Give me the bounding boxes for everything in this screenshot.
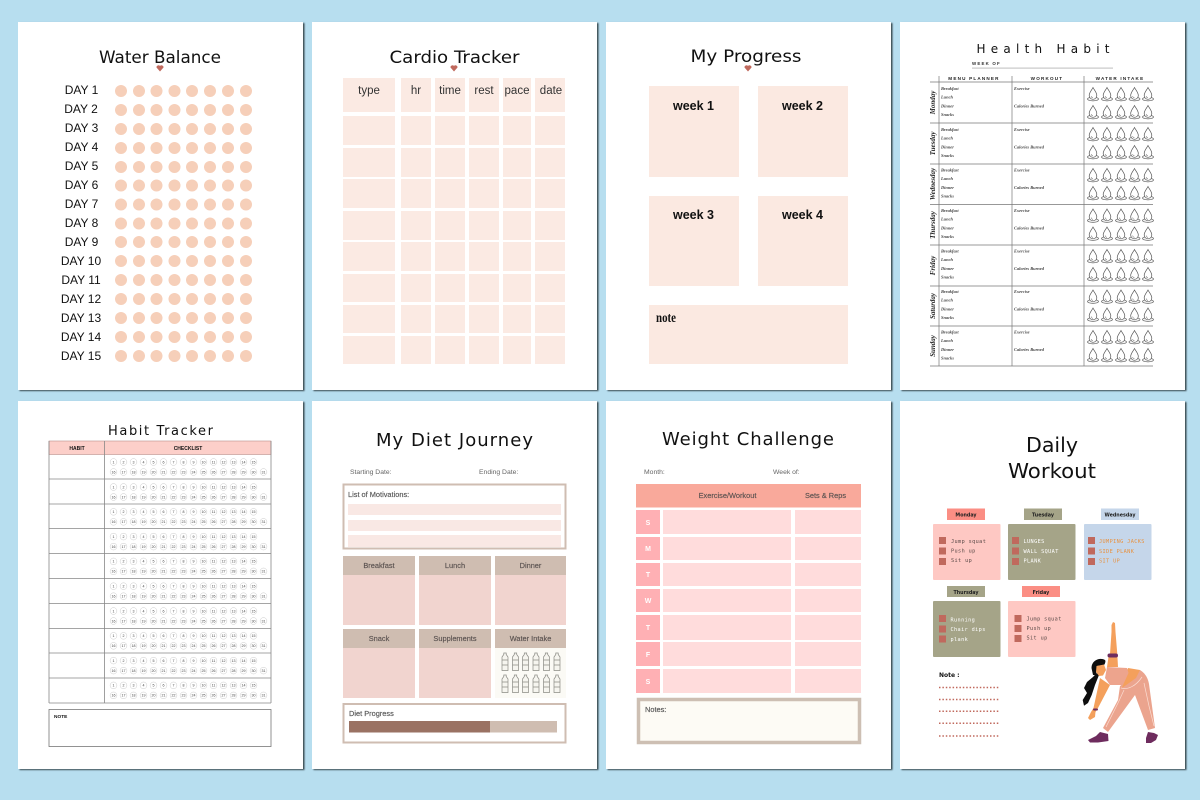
card: wednesday: JUMPING JACKS bbox=[1099, 539, 1145, 545]
date labels: Week of: bbox=[773, 469, 800, 476]
wrist band bbox=[1093, 708, 1098, 710]
meal: snack: Snack bbox=[369, 634, 390, 643]
panel: weight challenge bbox=[606, 401, 891, 769]
card: friday bbox=[1008, 586, 1076, 657]
water dots grid bbox=[115, 85, 252, 362]
table headers: WORKOUT bbox=[1031, 76, 1063, 81]
table headers bbox=[948, 76, 1144, 81]
head hair cap bbox=[1092, 659, 1105, 675]
motivations box: List of Motivations: bbox=[348, 490, 409, 499]
meal: breakfast: Breakfast bbox=[363, 561, 395, 570]
heading: daily workout: Workout bbox=[1008, 459, 1096, 483]
table header bbox=[49, 441, 271, 454]
card: wednesday: SIDE PLANK bbox=[1099, 549, 1135, 555]
week 3 box bbox=[649, 196, 739, 286]
day labels: DAY 1 bbox=[65, 83, 99, 97]
day labels: DAY 3 bbox=[65, 121, 99, 135]
date labels bbox=[350, 469, 518, 476]
date labels: Starting Date: bbox=[350, 469, 392, 476]
card: monday: Monday bbox=[955, 512, 977, 518]
notes box bbox=[638, 700, 860, 742]
day row labels bbox=[940, 86, 1045, 360]
column headers: type bbox=[358, 85, 380, 97]
day labels: DAY 7 bbox=[65, 197, 99, 211]
meal: lunch: Lunch bbox=[445, 561, 465, 570]
table headers: MENU PLANNER bbox=[948, 76, 1000, 81]
week 2 box: week 2 bbox=[781, 99, 823, 113]
meal: dinner: Dinner bbox=[520, 561, 542, 570]
table grid lines bbox=[930, 76, 1153, 366]
raised arm bbox=[1107, 622, 1118, 667]
day letters: W bbox=[645, 598, 652, 605]
day labels: DAY 13 bbox=[61, 311, 101, 325]
table header: Exercise/Workout bbox=[699, 491, 756, 500]
day labels: DAY 4 bbox=[65, 140, 99, 154]
water drops bbox=[1088, 88, 1154, 362]
wristband bbox=[1108, 654, 1118, 658]
card: thursday: Thursday bbox=[954, 590, 979, 596]
day letters: T bbox=[646, 572, 651, 579]
table header: HABIT bbox=[69, 446, 85, 452]
table header: CHECKLIST bbox=[174, 446, 202, 452]
illustration: stretching woman bbox=[1083, 622, 1158, 743]
day labels: DAY 11 bbox=[61, 273, 101, 287]
column headers: rest bbox=[474, 85, 494, 97]
card: monday: Sit up bbox=[951, 558, 972, 564]
table header bbox=[636, 484, 861, 508]
notes box: Notes: bbox=[645, 705, 666, 714]
leggings highlight bbox=[1106, 677, 1154, 727]
hair bbox=[1083, 673, 1099, 706]
icon: heart bbox=[450, 65, 458, 72]
day labels: DAY 8 bbox=[65, 216, 99, 230]
heading: daily workout bbox=[1008, 433, 1096, 483]
meal: snack bbox=[343, 629, 415, 698]
table header: Sets & Reps bbox=[805, 491, 846, 500]
day letters: S bbox=[646, 520, 651, 527]
heading: habit tracker: Habit Tracker bbox=[108, 424, 214, 439]
panel: cardio tracker bbox=[312, 22, 597, 390]
card: tuesday: LUNGES bbox=[1024, 539, 1045, 545]
day labels: DAY 15 bbox=[61, 349, 101, 363]
date labels: Ending Date: bbox=[479, 469, 518, 476]
heading: my diet journey: My Diet Journey bbox=[376, 430, 533, 451]
exercise rows bbox=[663, 510, 861, 693]
column headers: time bbox=[439, 85, 461, 97]
card: wednesday: SIT UP bbox=[1099, 558, 1120, 564]
panel: health habit bbox=[900, 22, 1185, 390]
meal: dinner bbox=[495, 556, 566, 625]
card: tuesday: WALL SQUAT bbox=[1024, 549, 1059, 555]
hanging arm bbox=[1088, 678, 1110, 720]
weekday names: Thursday bbox=[929, 210, 937, 239]
card: friday: Friday bbox=[1033, 590, 1050, 596]
note box bbox=[649, 305, 848, 364]
heading: water balance: Water Balance bbox=[99, 48, 221, 68]
day letters: S bbox=[646, 679, 651, 686]
week 3 box: week 3 bbox=[672, 208, 714, 222]
weekday names bbox=[929, 90, 937, 357]
date labels bbox=[644, 469, 800, 476]
note box bbox=[49, 710, 271, 746]
icon: heart bbox=[156, 65, 164, 72]
card: friday: Jump squat bbox=[1026, 616, 1062, 622]
column headers bbox=[358, 85, 562, 97]
card: wednesday: Wednesday bbox=[1105, 512, 1136, 518]
belly bbox=[1122, 668, 1140, 688]
weekday names: Tuesday bbox=[929, 131, 937, 155]
day labels bbox=[61, 83, 101, 363]
note box: NOTE bbox=[54, 714, 68, 720]
weekday names: Monday bbox=[929, 90, 937, 115]
leggings bbox=[1103, 670, 1155, 732]
panel: habit tracker bbox=[18, 401, 303, 769]
note box: note bbox=[656, 311, 676, 326]
left shoe bbox=[1088, 732, 1108, 742]
day labels: DAY 2 bbox=[64, 102, 98, 116]
day labels: DAY 10 bbox=[61, 254, 101, 268]
diet progress bar bbox=[344, 704, 566, 742]
sports top bbox=[1105, 667, 1128, 685]
card: monday: Jump squat bbox=[951, 539, 986, 545]
meal: breakfast bbox=[343, 556, 415, 625]
heading: weight challenge: Weight Challenge bbox=[662, 429, 834, 450]
icon: heart bbox=[744, 65, 752, 72]
meal: supplements bbox=[419, 629, 491, 698]
day letters: F bbox=[646, 652, 651, 659]
column headers: date bbox=[540, 85, 562, 97]
heading: health habit: Health Habit bbox=[976, 42, 1110, 56]
card: tuesday: Tuesday bbox=[1032, 512, 1055, 518]
week 1 box bbox=[649, 86, 739, 177]
meal: supplements: Supplements bbox=[433, 634, 477, 643]
day labels: DAY 14 bbox=[61, 330, 101, 344]
table headers: WATER INTAKE bbox=[1096, 76, 1144, 81]
week of line: WEEK OF bbox=[972, 61, 1001, 66]
day labels: DAY 9 bbox=[65, 235, 99, 249]
day labels: DAY 5 bbox=[65, 159, 99, 173]
meal: lunch bbox=[419, 556, 491, 625]
heading: daily workout: Daily bbox=[1026, 433, 1078, 457]
card: thursday: Running bbox=[950, 618, 975, 624]
card: friday: Push up bbox=[1026, 626, 1051, 632]
panel: daily workout bbox=[900, 401, 1185, 769]
weekday names: Wednesday bbox=[929, 167, 937, 200]
week 2 box bbox=[758, 86, 848, 177]
right shoe bbox=[1146, 732, 1158, 743]
card: monday: Push up bbox=[951, 548, 976, 554]
card: thursday: plank bbox=[950, 637, 969, 643]
day labels: DAY 12 bbox=[61, 292, 101, 306]
weekday names: Sunday bbox=[929, 334, 937, 357]
date labels: Month: bbox=[644, 469, 665, 476]
diet progress bar: Diet Progress bbox=[349, 709, 394, 718]
panel: water balance bbox=[18, 22, 303, 390]
day letters: T bbox=[646, 625, 651, 632]
week 1 box: week 1 bbox=[672, 99, 714, 113]
weekday names: Friday bbox=[929, 255, 937, 275]
card: tuesday: PLANK bbox=[1024, 558, 1042, 564]
week 4 box: week 4 bbox=[781, 208, 823, 222]
card: friday: Sit up bbox=[1026, 636, 1048, 642]
note lines: Note : bbox=[939, 672, 960, 679]
face bbox=[1096, 664, 1106, 676]
day letters: M bbox=[645, 546, 651, 553]
panel: my progress bbox=[606, 22, 891, 390]
card: thursday bbox=[933, 586, 1000, 657]
week 4 box bbox=[758, 196, 848, 286]
table grid bbox=[49, 441, 271, 703]
heading: cardio tracker: Cardio Tracker bbox=[390, 48, 520, 68]
motivations box bbox=[344, 484, 566, 548]
water intake bottles bbox=[495, 629, 566, 698]
cardio table bbox=[343, 78, 565, 364]
card: monday bbox=[933, 508, 1000, 580]
panel: my diet journey bbox=[312, 401, 597, 769]
checklist numbers bbox=[110, 459, 267, 699]
weekday names: Saturday bbox=[929, 292, 937, 319]
column headers: hr bbox=[411, 85, 421, 97]
heading: my progress: My Progress bbox=[690, 47, 802, 67]
water intake bottles: Water Intake bbox=[510, 634, 551, 643]
note lines bbox=[939, 672, 1000, 736]
day letters bbox=[636, 510, 660, 693]
day labels: DAY 6 bbox=[65, 178, 99, 192]
card: wednesday bbox=[1084, 508, 1152, 580]
card: tuesday bbox=[1008, 508, 1076, 580]
card: thursday: Chair dips bbox=[950, 627, 986, 633]
column headers: pace bbox=[505, 85, 529, 97]
